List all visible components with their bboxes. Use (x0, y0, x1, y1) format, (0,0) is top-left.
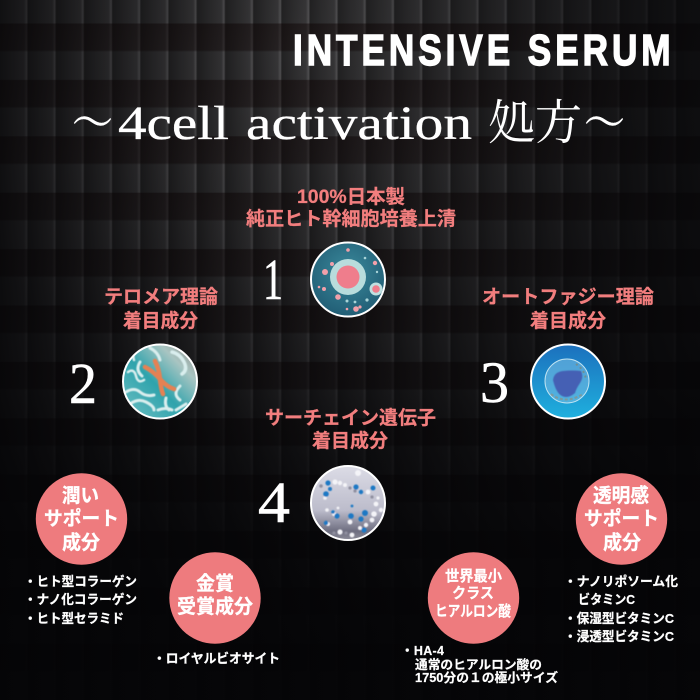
badge: moisture support ingredients: サポート (44, 508, 119, 530)
list: moisture ingredients: ・ナノ化コラーゲン (24, 592, 137, 607)
title: INTENSIVE SERUM: INTENSIVE SERUM (293, 26, 671, 75)
heading 3: autophagy theory: 着目成分 (530, 309, 606, 332)
badge: moisture support ingredients: 成分 (62, 531, 100, 554)
number 2: 2 (69, 351, 97, 416)
list: transparency ingredients: ビタミンC (578, 592, 636, 607)
badge: world's smallest class hyaluronic acid: 世界最小 (445, 568, 502, 585)
list: transparency ingredients: ・保湿型ビタミンC (564, 611, 675, 626)
subtitle: 4cell activation: 4cell (118, 97, 229, 150)
badge: transparency support ingredients: 成分 (603, 531, 641, 554)
list: HA-4 description: 1750分の１の極小サイズ (415, 670, 559, 685)
heading 4: sirtuin gene (265, 407, 436, 452)
subtitle: 4cell activation: activation (246, 97, 472, 150)
subtitle: 4cell activation: 処方 (488, 97, 582, 150)
heading 4: sirtuin gene: サーチェイン遺伝子 (265, 407, 436, 429)
subtitle: 4cell activation: 〜 (584, 97, 625, 150)
list: gold award ingredient: ・ロイヤルビオサイト (153, 651, 280, 666)
badge: moisture support ingredients (36, 473, 127, 565)
subtitle: 4cell activation (72, 97, 625, 150)
list: moisture ingredients (24, 574, 137, 626)
heading 3: autophagy theory (482, 286, 654, 332)
number 3: 3 (480, 350, 509, 415)
icon: chromosome (123, 344, 197, 418)
badge: world's smallest class hyaluronic acid: ヒアルロン酸 (435, 602, 511, 620)
heading 3: autophagy theory: オートファジー理論 (482, 286, 654, 308)
list: HA-4 description: ・HA-4 (401, 644, 444, 658)
badge: gold award ingredients: 受賞成分 (177, 595, 253, 618)
heading 2: telomere theory: テロメア理論 (104, 286, 218, 308)
list: HA-4 description (401, 644, 559, 685)
heading 2: telomere theory (104, 286, 218, 332)
badge: gold award ingredients: 金賞 (196, 573, 234, 595)
list: transparency ingredients: ・ナノリポソーム化 (564, 574, 678, 589)
subtitle: 4cell activation: 〜 (72, 97, 113, 150)
icon: blue sphere cell (531, 344, 605, 418)
badge: transparency support ingredients (576, 473, 667, 565)
badge: transparency support ingredients: 透明感 (593, 484, 649, 507)
list: moisture ingredients: ・ヒト型コラーゲン (24, 574, 137, 589)
badge: moisture support ingredients: 潤い (62, 485, 99, 507)
heading 1: human stem cell culture supernatant: 純正ヒト幹細胞培養上清 (246, 208, 456, 230)
heading 4: sirtuin gene: 着目成分 (312, 429, 388, 452)
badge: gold award ingredients (169, 552, 261, 644)
heading 1: human stem cell culture supernatant (246, 186, 456, 230)
heading 1: human stem cell culture supernatant: 100%日本製 (297, 186, 405, 208)
number 4: 4 (258, 470, 290, 535)
list: HA-4 description: 通常のヒアルロン酸の (415, 657, 542, 672)
heading 2: telomere theory: 着目成分 (123, 309, 198, 332)
badge: world's smallest class hyaluronic acid (428, 552, 519, 644)
icon: stem cell (311, 242, 385, 316)
badge: transparency support ingredients: サポート (584, 508, 659, 530)
badge: world's smallest class hyaluronic acid: クラス (452, 585, 494, 602)
list: transparency ingredients: ・浸透型ビタミンC (564, 629, 675, 644)
icon: molecule ring (311, 466, 385, 540)
list: moisture ingredients: ・ヒト型セラミド (24, 611, 124, 626)
list: transparency ingredients (564, 574, 678, 644)
number 1: 1 (263, 247, 283, 312)
